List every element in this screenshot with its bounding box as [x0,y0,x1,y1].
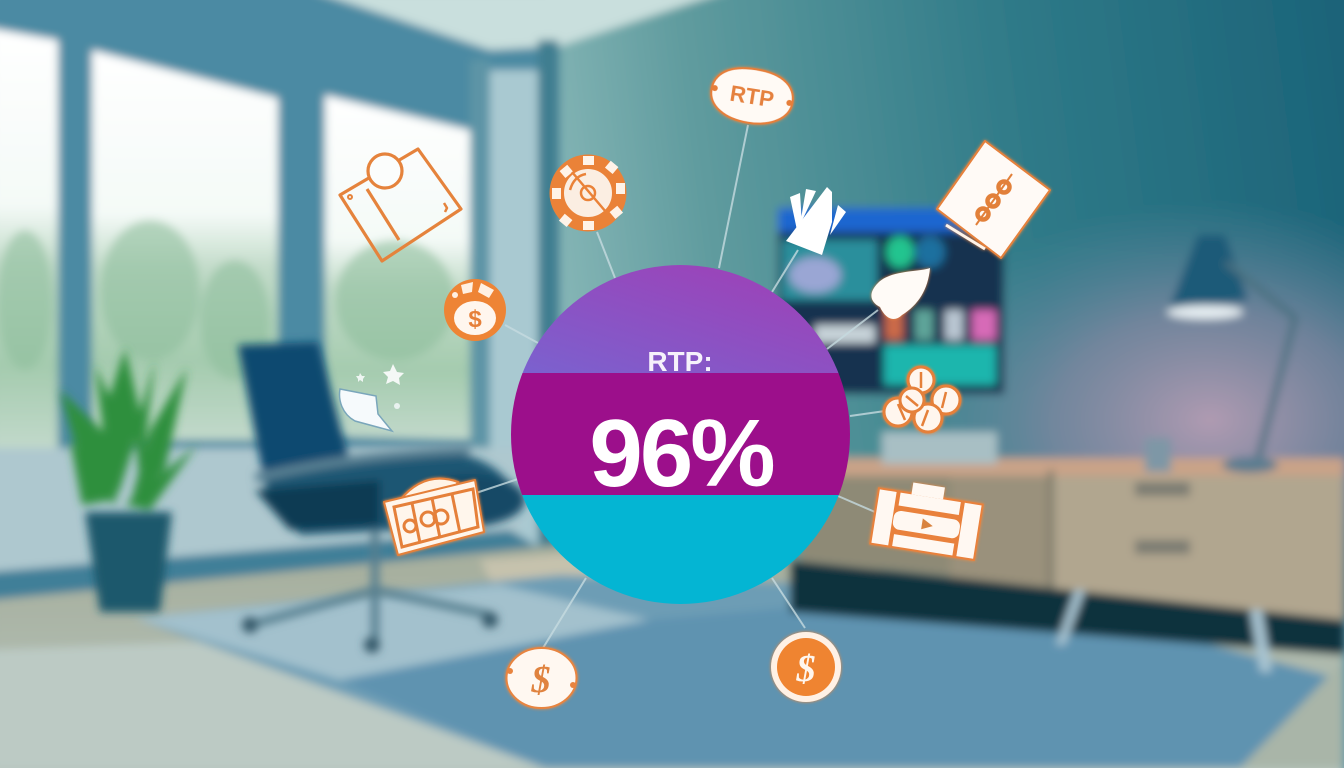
wall column [480,70,540,570]
right floor edge [1240,660,1344,768]
lamp [1168,235,1248,312]
icon: coin pile [884,367,960,432]
ceiling [310,0,730,50]
left wall [0,0,560,620]
foliage behind glass [0,220,455,380]
icon: poker chip roulette [550,154,626,232]
icon: dollar token outline: $ [530,659,550,701]
icon: sparkle hand [340,364,404,431]
icon: cards fan [786,187,846,255]
floor [0,545,1344,768]
RTP label: RTP: [647,346,713,377]
icon: gaming briefcase with play [869,477,985,561]
window sill and lower wall [0,448,520,576]
monitor on wall [778,212,1004,394]
right wall [545,0,1344,620]
windows [0,28,58,450]
icon: dollar card book [937,141,1050,258]
icon: RTP badge [707,63,797,129]
icon: dollar coin: $ [796,648,816,690]
plant [60,348,197,510]
rug [135,575,1344,768]
icon: leaf shape [871,268,930,319]
connector lines [476,125,885,648]
central RTP pie [510,264,852,605]
icon: dollar chip [444,279,506,341]
chair [238,342,372,535]
icon: slot machine ticket [384,479,484,555]
icon: dollar coin [771,632,841,702]
icon: playing card with circle [340,149,461,261]
icon: RTP badge: RTP [728,81,776,112]
items on sideboard [882,432,997,464]
icon: dollar token outline [506,648,576,708]
sideboard [800,460,1344,620]
icon: dollar chip: $ [468,306,482,333]
96% value: 96% [589,400,773,507]
